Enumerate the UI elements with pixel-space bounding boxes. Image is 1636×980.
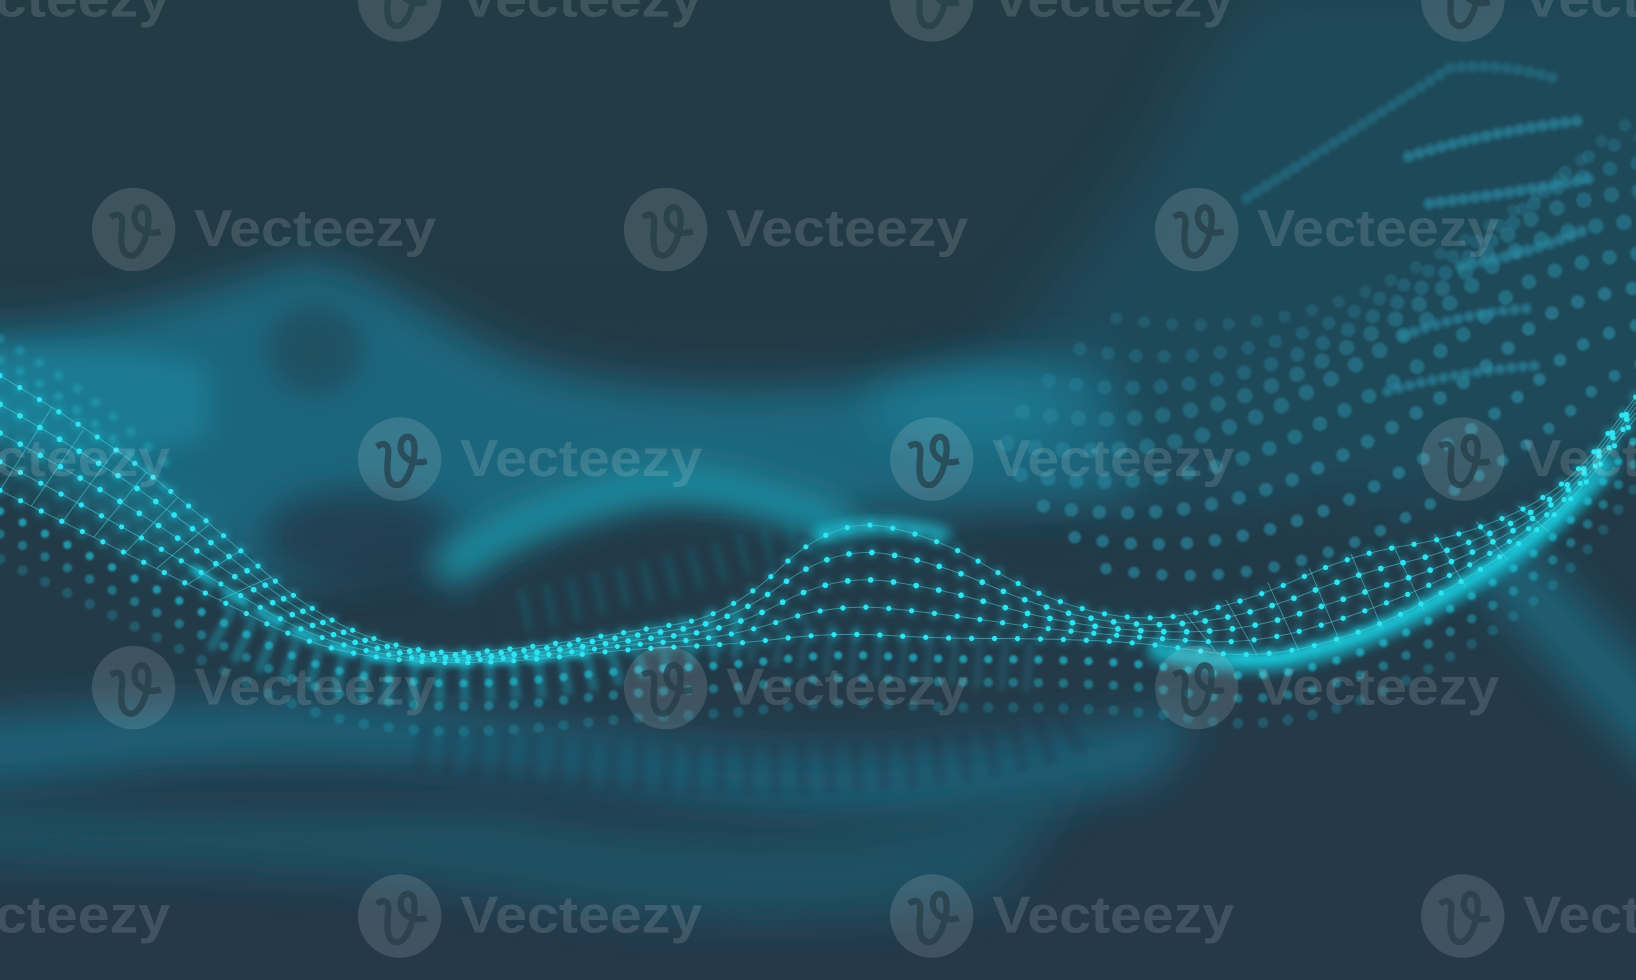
haze: bottom band xyxy=(0,767,1085,920)
haze: dark interior of central mesh xyxy=(501,490,1356,668)
fringe: dark bars in lower band xyxy=(417,720,1085,769)
watermark row 5 xyxy=(0,874,1636,958)
haze: bright left edge xyxy=(0,346,209,459)
glow: central crest xyxy=(819,526,944,534)
watermark row 1 xyxy=(0,0,1636,42)
watermark row 2: Vecteezy xyxy=(1257,200,1499,258)
watermark row 5: Vecteezy xyxy=(460,887,702,945)
upper right beaded streaks xyxy=(1247,67,1596,391)
glow: lower right core xyxy=(1231,490,1581,658)
watermark row 2: Vecteezy xyxy=(194,200,436,258)
watermark row 4: Vecteezy xyxy=(726,658,968,716)
dot rows fading below the mesh xyxy=(0,438,1636,731)
watermark row 3: Vecteezy xyxy=(460,430,702,488)
watermark row 4: Vecteezy xyxy=(194,658,436,716)
haze: bright centre patch xyxy=(866,374,1075,444)
fringe: vertical bars under the crest xyxy=(219,542,1043,678)
watermark row 3: Vecteezy xyxy=(992,430,1234,488)
upper left blurry dots xyxy=(0,339,177,501)
mesh dot glow xyxy=(0,376,1636,663)
glow: left bright fold xyxy=(193,569,584,661)
haze: right diagonal limb xyxy=(1492,553,1636,762)
haze: lower band xyxy=(0,701,1200,812)
upper right blurry dot grid xyxy=(1007,94,1636,575)
watermark row 4 xyxy=(92,646,1499,729)
watermark row 3 xyxy=(0,417,1636,501)
glow: lower right bright edge xyxy=(1158,464,1607,662)
haze: upper right mesh xyxy=(986,0,1636,522)
mesh cross lines: right xyxy=(1184,506,1549,655)
haze: middle arc xyxy=(454,483,835,563)
watermark row 2: Vecteezy xyxy=(726,200,968,258)
mesh cross lines: left xyxy=(0,407,271,600)
haze: dark spot xyxy=(267,304,363,395)
mesh dots xyxy=(0,376,1636,663)
mesh lines xyxy=(0,376,1636,663)
watermark row 4: Vecteezy xyxy=(1257,658,1499,716)
haze: upper left band xyxy=(0,261,1137,584)
haze: dark hollow under upper band xyxy=(261,489,459,585)
watermark row 2 xyxy=(92,188,1499,271)
watermark row 5: Vecteezy xyxy=(992,887,1234,945)
glow: left mesh xyxy=(0,428,188,553)
